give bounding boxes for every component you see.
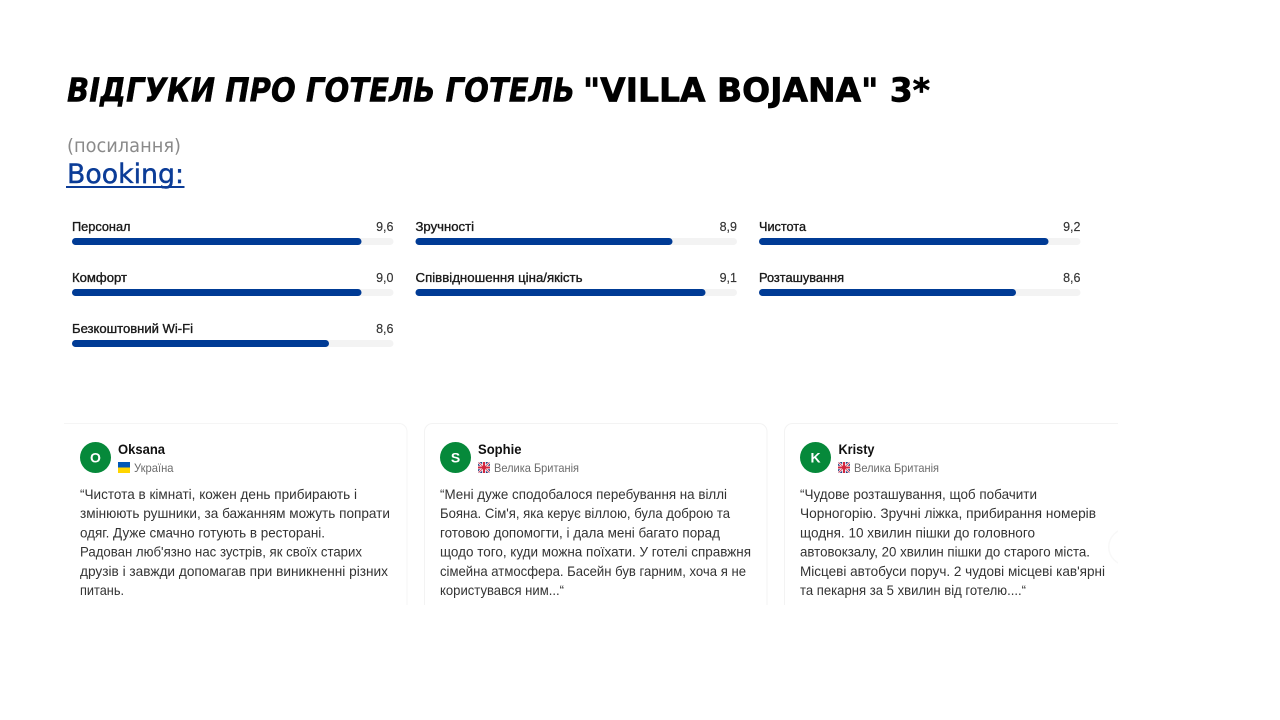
rating: Розташування (759, 271, 1081, 296)
flag: United Kingdom (838, 462, 850, 473)
rating: Комфорт: 9,0 (376, 271, 394, 285)
country: Україна (134, 461, 174, 475)
avatar: Oksana (80, 442, 111, 473)
review text (80, 486, 390, 598)
booking link heading: Booking: (67, 159, 184, 190)
review text: користувався ним...“ (440, 582, 564, 598)
rating: Безкоштовний Wi-Fi (72, 322, 394, 347)
country: Велика Британія (854, 461, 939, 475)
review text: щодо того, куди можна поїхати. У готелі справжня (440, 544, 751, 560)
rating: Персонал: Персонал (72, 220, 130, 234)
review text: одяг. Дуже смачно готують в ресторані. (80, 524, 325, 540)
carousel next button (1108, 528, 1146, 566)
flag: Ukraine (118, 462, 130, 473)
avatar: Kristy: K (810, 450, 821, 466)
link note: (посилання) (67, 135, 181, 157)
review text: друзів і завжди допомагав при виникненні різних (80, 563, 388, 579)
review text: та пекарня за 5 хвилин від готелю....“ (800, 582, 1026, 598)
rating: Зручності (416, 220, 737, 245)
reviewer name: Kristy (838, 441, 875, 457)
rating: Персонал: 9,6 (376, 220, 394, 234)
rating: Чистота (759, 220, 1081, 245)
rating: Чистота: 9,2 (1063, 220, 1081, 234)
review text: “Мені дуже сподобалося перебування на віллі (440, 486, 727, 502)
review text: Радован люб'язно нас зустрів, як своїх старих (80, 544, 362, 560)
rating: Розташування: Розташування (759, 271, 844, 285)
avatar: Kristy (800, 442, 831, 473)
rating: Зручності: 8,9 (720, 220, 737, 234)
review text: сімейна атмосфера. Басейн був гарним, хоча я не (440, 563, 746, 579)
review text: готовою допомогти, і дала мені багато порад (440, 524, 720, 540)
rating: Чистота: Чистота (759, 220, 806, 234)
review text: “Чистота в кімнаті, кожен день прибирають і (80, 486, 357, 502)
rating: Співвідношення ціна/якість: Співвідношення ціна/якість (416, 271, 582, 285)
avatar: Oksana: O (90, 450, 101, 466)
review text: “Чудове розташування, щоб побачити (800, 486, 1037, 502)
avatar: Sophie: S (451, 450, 460, 466)
rating: Розташування: 8,6 (1063, 271, 1081, 285)
rating: Зручності: Зручності (416, 220, 474, 234)
review cards (64, 424, 1146, 620)
review text: питань. (80, 582, 124, 598)
reviewer name: Sophie (478, 441, 522, 457)
rating: Персонал (72, 220, 394, 245)
reviewer name: Oksana (118, 441, 165, 457)
flag: United Kingdom (478, 462, 490, 473)
rating: Безкоштовний Wi-Fi: 8,6 (376, 322, 394, 336)
title: "VILLA BOJANA" 3* (583, 70, 930, 110)
title: ВІДГУКИ ПРО ГОТЕЛЬ ГОТЕЛЬ (67, 70, 575, 110)
rating: Комфорт: Комфорт (72, 271, 127, 285)
review text (440, 486, 751, 598)
review text: автовокзалу, 20 хвилин пішки до старого міста. (800, 544, 1090, 560)
review text (800, 486, 1105, 598)
rating: Безкоштовний Wi-Fi: Безкоштовний Wi-Fi (72, 322, 193, 336)
rating: Співвідношення ціна/якість: 9,1 (720, 271, 737, 285)
review text: Чорногорію. Зручні ліжка, прибирання номерів (800, 505, 1096, 521)
rating: Комфорт (72, 271, 394, 296)
card: Oksana (64, 424, 407, 620)
rating chart (72, 220, 1081, 347)
review text: Бояна. Сім'я, яка керує віллою, була доброю та (440, 505, 730, 521)
review text: змінюють рушники, за бажанням можуть попрати (80, 505, 390, 521)
rating: Співвідношення ціна/якість (416, 271, 737, 296)
review text: Місцеві автобуси поруч. 2 чудові місцеві кав'ярні (800, 563, 1105, 579)
card: Sophie (424, 424, 767, 620)
country: Велика Британія (494, 461, 579, 475)
card: Kristy (784, 423, 1118, 605)
title (67, 70, 930, 110)
review text: щодня. 10 хвилин пішки до головного (800, 524, 1035, 540)
avatar: Sophie (440, 442, 471, 473)
